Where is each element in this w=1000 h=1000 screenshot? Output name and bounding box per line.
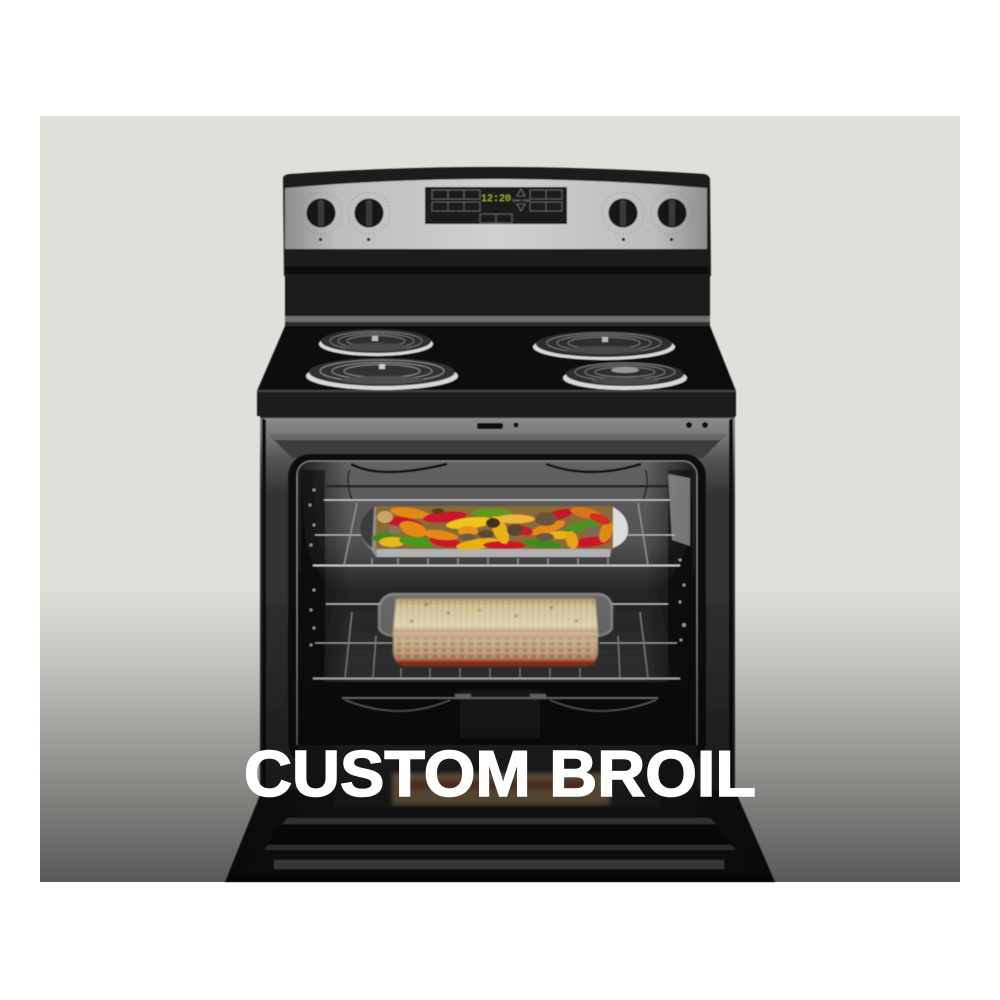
lasagna dish — [379, 594, 612, 666]
peppers baking pan — [360, 505, 628, 557]
title: CUSTOM BROIL — [244, 737, 756, 810]
open oven door — [225, 745, 775, 882]
peppers and mushrooms — [370, 505, 615, 552]
oven cavity — [288, 454, 706, 764]
burner back left — [319, 329, 433, 356]
clock readout: 12:20 — [481, 194, 511, 205]
door glass reflection — [392, 773, 610, 805]
display panel — [425, 187, 567, 224]
broil element — [348, 464, 647, 500]
upper rack — [313, 500, 680, 566]
lower cavity — [300, 682, 693, 752]
burner front left — [306, 358, 458, 390]
knobs — [300, 192, 693, 241]
burner back right — [533, 331, 675, 360]
range illustration — [225, 167, 775, 882]
rear shelf — [285, 275, 710, 326]
bottom fade overlay — [40, 585, 960, 882]
burner front right — [563, 362, 687, 390]
mushrooms — [535, 512, 557, 526]
oven door frame — [260, 416, 735, 806]
lower door hinges and wire — [342, 694, 658, 711]
steel control panel — [285, 179, 707, 249]
photo panel background — [40, 116, 960, 882]
temp label: TEMP / TIME — [512, 198, 530, 202]
cooktop — [257, 326, 736, 416]
side rack supports — [301, 470, 692, 695]
control backguard — [283, 167, 711, 276]
lower rack — [313, 604, 680, 678]
